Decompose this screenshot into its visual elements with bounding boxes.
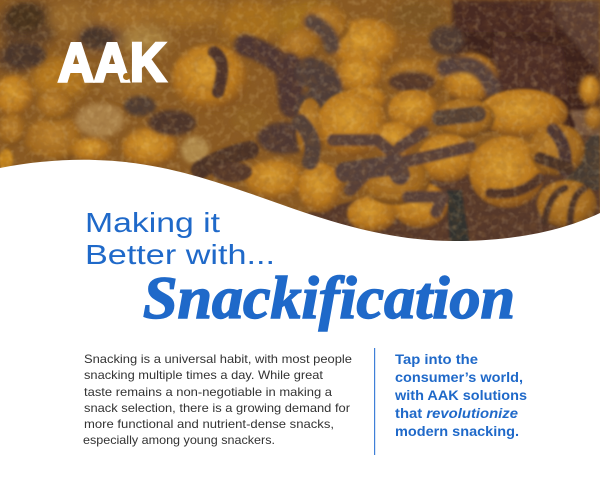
body paragraph: Snacking is a universal habit, with most people: [84, 352, 352, 366]
callout: tap into the consumer's world: with AAK solutions: [394, 387, 527, 403]
body paragraph: especially among young snackers.: [83, 433, 275, 447]
popcorn texture: [0, 0, 600, 245]
divider line: [374, 348, 375, 455]
heading: Making it Better with...: Better with...: [85, 239, 275, 270]
callout: tap into the consumer's world: [394, 351, 527, 439]
white wave panel: [0, 160, 600, 482]
wooden table: [300, 110, 600, 245]
body paragraph: snack selection, there is a growing demand for: [84, 401, 350, 415]
midground popcorn: [0, 4, 600, 200]
foreground popcorn cluster: [0, 52, 597, 232]
callout: tap into the consumer's world: Tap into the: [395, 351, 478, 367]
heading: Snackification: Snackification: [143, 265, 515, 331]
logo: AAK: AAK: [58, 32, 166, 93]
heading: Making it Better with...: Making it: [85, 207, 220, 238]
body paragraph: taste remains a non-negotiable in making a: [84, 385, 332, 399]
body paragraph: more functional and nutrient-dense snacks,: [84, 417, 334, 431]
background photo: caramel popcorn with chocolate: [0, 0, 600, 245]
body paragraph: snacking multiple times a day. While great: [84, 368, 324, 382]
soft background popcorn: [0, 0, 448, 98]
heading: Making it Better with...: [85, 207, 275, 270]
callout: tap into the consumer's world: that revolutionize: [395, 405, 518, 421]
body paragraph: [83, 352, 352, 447]
callout: tap into the consumer's world: consumer’s world,: [395, 369, 523, 385]
chocolate blocks in the background: [452, 0, 600, 130]
callout: tap into the consumer's world: modern snacking.: [395, 423, 519, 439]
